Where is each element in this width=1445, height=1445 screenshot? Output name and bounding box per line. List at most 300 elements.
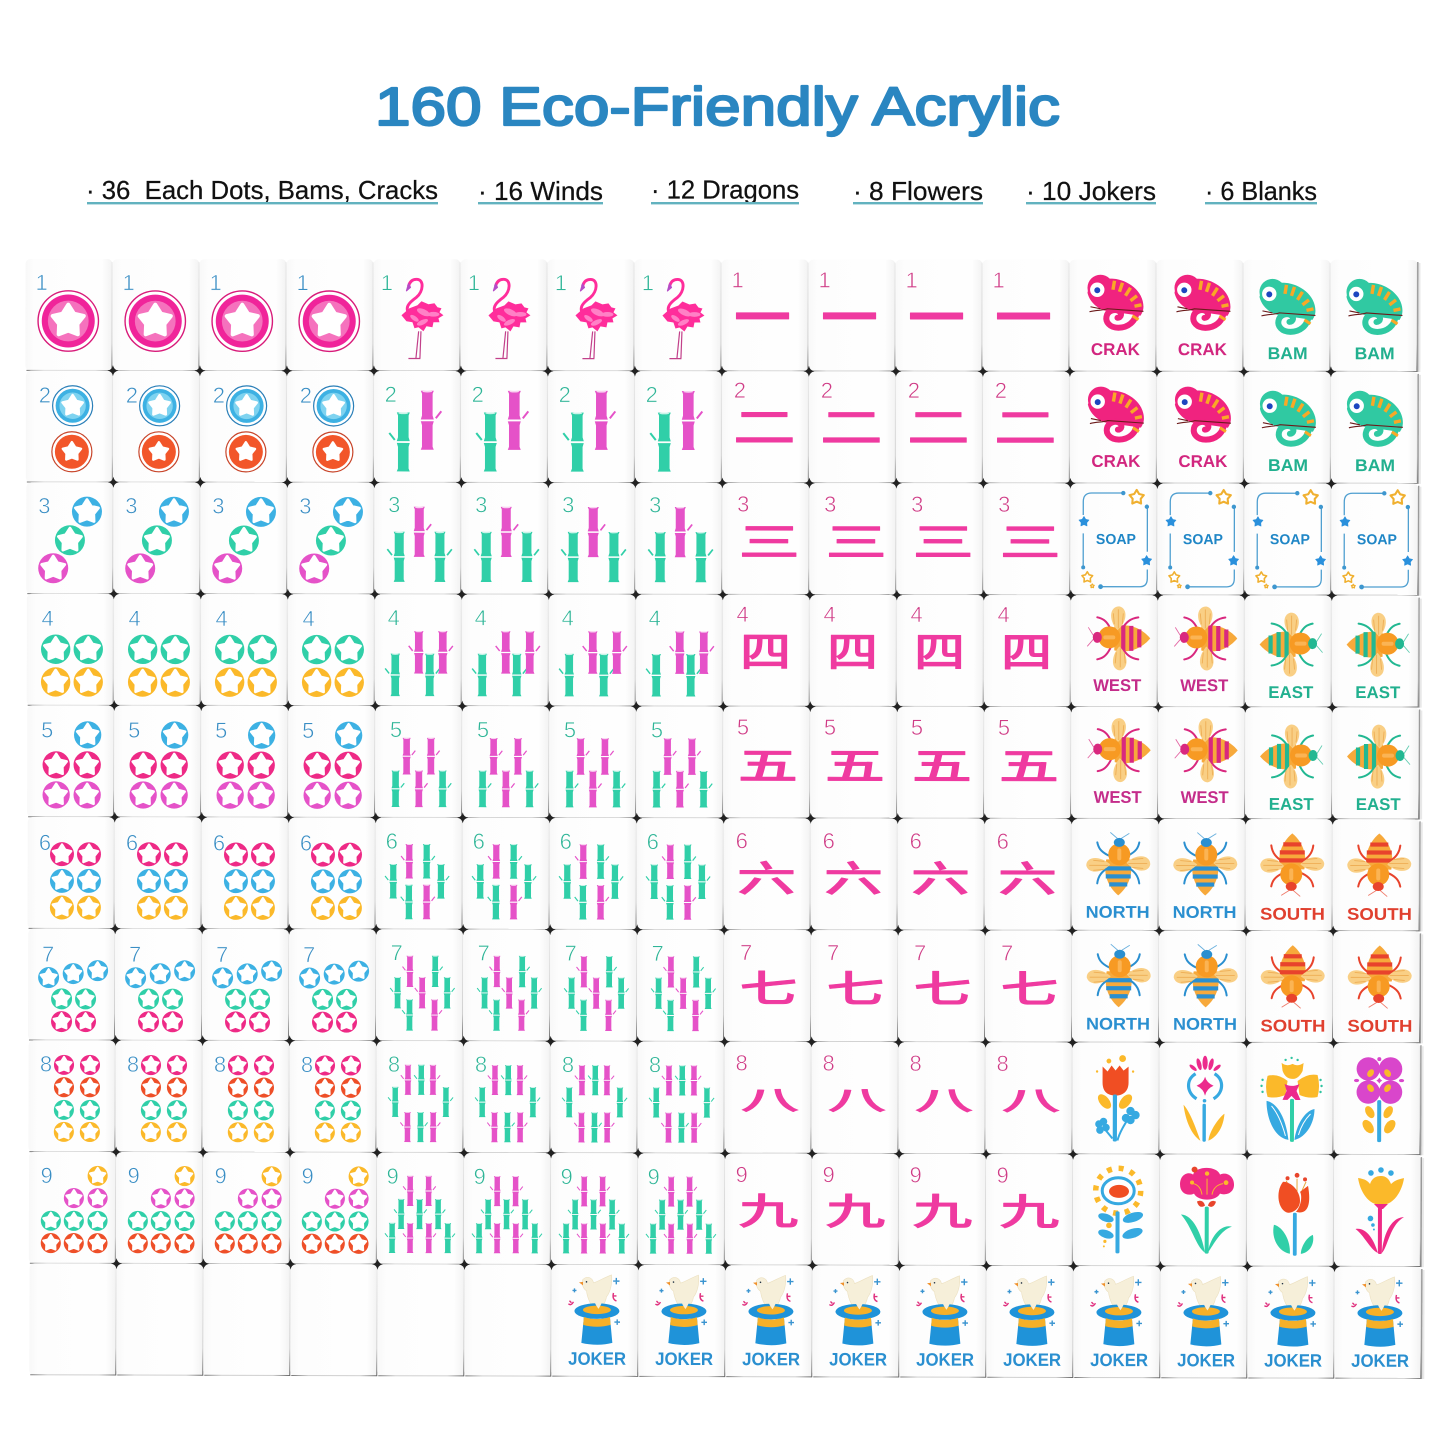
tile: dot 8: 8 (127, 1052, 139, 1077)
tile: bam 6 (631, 813, 724, 930)
tile: crack 9: 九 (999, 1192, 1059, 1233)
tile: crack 5: 五 (912, 745, 972, 788)
tile: crack 1: 一 (995, 287, 1052, 352)
tile: south wind: SOUTH (1260, 1017, 1325, 1036)
subheading: 10 jokers: · 10 Jokers (1026, 176, 1156, 206)
tile: bam 3 (630, 477, 722, 595)
tile: crack 2 (803, 366, 896, 483)
tile: dot 9 (110, 1146, 203, 1264)
tile: crack 6: 6 (997, 829, 1009, 854)
tile: bam 8: 8 (562, 1052, 574, 1077)
tile: dot 6: 6 (39, 830, 51, 855)
tile: crak dragon (1069, 260, 1156, 372)
tile: flower red tulip with stamens (1241, 1149, 1334, 1267)
tile: bam 5 (370, 700, 462, 818)
tile: bam 4 (630, 589, 723, 707)
tile: dot 9: 9 (214, 1163, 227, 1188)
tile: joker: JOKER (1003, 1350, 1061, 1370)
tile: dot 5 (196, 700, 288, 818)
tile: dot 8: 8 (40, 1051, 52, 1076)
tile: crack 5: 五 (825, 745, 885, 788)
tile: dot 4 (195, 589, 288, 706)
tile row 1 (25, 259, 1420, 372)
tile: dot 7 (28, 929, 115, 1041)
tile row 3 (26, 477, 1421, 596)
tile: joker: JOKER (1351, 1351, 1409, 1371)
tile: crak dragon (1064, 366, 1157, 484)
tile: crack 4: 四 (914, 629, 965, 676)
tile: bam 6 (370, 812, 463, 930)
tile: dot 7 (196, 923, 289, 1041)
tile: dot 3 (282, 477, 374, 594)
tile: bam 4: 4 (649, 606, 661, 631)
tile: dot 9: 9 (40, 1163, 53, 1188)
tile: dot 3 (195, 477, 287, 594)
tile: bam 6: 6 (647, 829, 659, 854)
tile: soap: SOAP (1270, 532, 1310, 548)
tile: joker: JOKER (916, 1350, 974, 1370)
tile: flamingo bam 1: 1 (381, 270, 393, 295)
tile: bam 8 (458, 1036, 551, 1153)
tile: crack 7: 7 (914, 940, 926, 965)
tile: bam 4 (369, 589, 462, 706)
tile: dot 2 (281, 365, 374, 483)
tile: dot 7 (109, 923, 202, 1041)
tile: south wind: SOUTH (1260, 905, 1325, 924)
tile: east wind: EAST (1269, 795, 1314, 814)
tile: dot 1: 1 (36, 270, 48, 295)
tile: bam 5: 5 (477, 717, 489, 742)
tile: bam 4: 4 (562, 606, 574, 631)
tile: west wind: WEST (1093, 676, 1142, 695)
tile: dot 1 (286, 259, 373, 371)
tile: dot 6: 6 (126, 830, 138, 855)
tile: crack 8: 8 (909, 1051, 922, 1076)
tile: crack 3 (717, 477, 809, 595)
tile: bam 8 (545, 1036, 638, 1153)
tile: dot 6 (196, 812, 289, 929)
tile: crack 9 (806, 1148, 899, 1266)
tile: crack 5: 5 (998, 715, 1010, 740)
tile: crack 3: 3 (911, 492, 923, 517)
tile: dot 4 (108, 588, 201, 706)
tile: crak dragon: CRAK (1178, 452, 1228, 471)
tile: crack 5 (718, 701, 810, 819)
tile: crack 1 (808, 260, 895, 372)
tile: crack 9: 九 (738, 1191, 798, 1233)
tile: bam 9 (458, 1147, 551, 1265)
tile row 4 (27, 588, 1422, 708)
tile: dot 9 (29, 1152, 116, 1264)
tile: crack 7 (979, 925, 1072, 1043)
tile: crack 4 (717, 589, 810, 707)
tile: bam dragon: BAM (1355, 456, 1395, 475)
tile: dot 7: 7 (42, 942, 54, 967)
tile: crack 8: 8 (735, 1050, 748, 1075)
tile: bam dragon (1325, 366, 1421, 484)
tile: crack 6: 6 (736, 828, 748, 853)
tile: crack 8: 八 (740, 1085, 800, 1116)
tile: dot 8: 8 (301, 1052, 313, 1077)
tile: crack 8 (806, 1036, 899, 1154)
tile: bam 9 (545, 1148, 638, 1265)
tile: crack 5: 五 (738, 745, 798, 788)
tile row 8 (28, 1035, 1424, 1155)
tile: joker (720, 1260, 813, 1377)
tile: joker: JOKER (1264, 1350, 1322, 1371)
tile: crack 5: 5 (824, 715, 836, 740)
tile: soap: SOAP (1183, 532, 1223, 548)
tile: crack 2: 二 (820, 404, 883, 452)
tile: crack 2: 二 (994, 404, 1057, 452)
tile: bam 8: 8 (649, 1052, 661, 1077)
tile: dot 3 (26, 482, 113, 594)
tile: north wind (1066, 813, 1159, 931)
tile: bam 3: 3 (388, 492, 400, 517)
tile: bam 7 (370, 924, 463, 1041)
tile: dot 1 (112, 259, 199, 371)
title: 160 Eco-Friendly Acrylic (375, 77, 1060, 137)
tile: crack 2: 二 (907, 404, 970, 452)
tile: dot 2 (26, 371, 113, 483)
tile: north wind (1066, 925, 1159, 1043)
tile: crack 2: 2 (821, 378, 833, 403)
tile: dot 1 (25, 259, 112, 371)
tile: bam 3: 3 (649, 492, 661, 517)
tile: bam 6 (457, 812, 550, 930)
tile: south wind (1240, 925, 1333, 1043)
tile: dot 2 (194, 365, 287, 483)
tile: bam dragon: BAM (1268, 456, 1308, 475)
tile: bam 2: 2 (559, 382, 571, 407)
tile: dot 4: 4 (215, 606, 228, 631)
tile: crack 9: 9 (735, 1162, 748, 1187)
tile: crack 1: 1 (732, 267, 744, 293)
tile: crack 4: 4 (823, 602, 836, 627)
tile: crack 8 (893, 1037, 986, 1154)
tile: dot 9 (284, 1147, 377, 1265)
tile: joker (1329, 1261, 1425, 1379)
tile: flamingo bam 1 (373, 259, 460, 371)
tile row 10 (29, 1258, 1425, 1379)
tile: crack 6: 六 (911, 859, 970, 900)
tile: dot 1: 1 (297, 270, 309, 295)
tile: dot 6 (283, 812, 376, 930)
tile: joker (1068, 1261, 1161, 1378)
tile: crack 1 (982, 260, 1069, 372)
tile: crack 8: 八 (827, 1085, 887, 1116)
tile: bam 5 (457, 701, 549, 818)
tile: dot 6: 6 (300, 830, 312, 855)
tile: dot 4 (282, 589, 375, 706)
tile: flamingo bam 1 (547, 259, 634, 371)
tile: bam 7 (544, 924, 637, 1042)
tile: crack 9: 九 (825, 1191, 885, 1233)
tile: crack 6: 六 (824, 859, 883, 900)
tile: west wind: WEST (1094, 788, 1142, 807)
tile: south wind (1327, 814, 1423, 931)
tile: crack 3: 3 (824, 492, 836, 517)
tile: crak dragon: CRAK (1091, 452, 1141, 471)
tile: bam 3: 3 (475, 492, 487, 517)
tile: flower pink bloom (1154, 1149, 1247, 1267)
tile: joker: JOKER (1177, 1350, 1235, 1370)
tile: south wind: SOUTH (1347, 1017, 1412, 1036)
tile: crack 6: 6 (910, 829, 922, 854)
tile: bam 5: 5 (390, 717, 402, 742)
tile row 5 (27, 700, 1422, 820)
tile: west wind (1153, 702, 1245, 819)
tile: crack 4: 四 (740, 629, 791, 676)
tile: bam 2: 2 (646, 382, 658, 407)
tile: dot 1: 1 (210, 270, 222, 295)
tile: dot 1: 1 (123, 270, 135, 295)
tile: west wind: WEST (1180, 676, 1229, 695)
tile: crak dragon (1156, 260, 1243, 372)
tile: flower red tulip (1067, 1037, 1160, 1155)
tile: crack 8: 八 (1001, 1086, 1061, 1116)
tile: joker (1242, 1261, 1335, 1379)
tile: east wind: EAST (1268, 683, 1314, 702)
tile: bam 5 (631, 701, 723, 818)
tile: crack 2: 2 (908, 378, 920, 403)
tile: bam 2 (542, 366, 635, 483)
tile: dot 3: 3 (299, 494, 312, 519)
tile: crack 1: 1 (819, 268, 831, 293)
tile: dot 8 (110, 1035, 203, 1152)
tile: flower pink diamond (1154, 1037, 1247, 1155)
tile: crack 2 (890, 366, 983, 483)
tile: joker (1155, 1261, 1248, 1378)
tile: crack 9: 九 (912, 1191, 972, 1233)
subheading: 12 dragons: · 12 Dragons (651, 174, 799, 204)
tile: blank (198, 1258, 291, 1376)
tile: crack 9: 9 (822, 1162, 835, 1187)
tile: east wind (1239, 590, 1332, 707)
tile: crack 7: 7 (827, 940, 839, 965)
tile: bam 6: 6 (473, 829, 485, 854)
tile: flamingo bam 1: 1 (555, 270, 567, 295)
tile: joker: JOKER (1090, 1350, 1148, 1370)
tile: dot 7 (283, 924, 376, 1041)
tile: crack 4 (978, 590, 1071, 707)
tile: dot 4: 4 (41, 606, 54, 631)
tile: bam 3: 3 (562, 492, 574, 517)
tile: crack 2: 2 (995, 378, 1007, 403)
tile: crack 5: 5 (911, 715, 923, 740)
tile: dot 5: 5 (41, 717, 53, 742)
tile: bam dragon (1243, 260, 1330, 372)
tile row 9 (29, 1146, 1424, 1267)
tile: crack 3 (978, 478, 1070, 595)
tile: north wind: NORTH (1086, 1015, 1150, 1034)
tile: crack 2 (716, 366, 809, 483)
tile: joker (981, 1260, 1074, 1378)
tile: bam 9: 9 (473, 1164, 486, 1189)
tile: crack 7 (718, 924, 811, 1042)
subheading: 8 flowers: · 8 Flowers (853, 176, 983, 206)
tile: crack 8 (980, 1037, 1073, 1154)
subheading: 36 each dots bams cracks: · 36 Each Dots, Bams, Cracks (86, 175, 438, 205)
tile: dot 2: 2 (300, 383, 312, 408)
tile: crack 7: 七 (739, 969, 797, 1010)
tile: crack 6: 六 (737, 859, 796, 900)
tile: crack 1: 一 (734, 287, 791, 352)
tile: joker (633, 1259, 726, 1377)
tile: crack 2: 2 (734, 378, 746, 403)
tile: blank (111, 1258, 204, 1376)
tile: joker: JOKER (655, 1349, 713, 1369)
tile: dot 9: 9 (127, 1163, 140, 1188)
tile: crack 6 (892, 813, 985, 931)
tile: blank (285, 1259, 378, 1376)
tile: crack 4: 四 (1001, 629, 1052, 676)
tile: dot 8 (28, 1040, 116, 1152)
tile: crack 3 (804, 478, 896, 595)
tile: bam 5: 5 (651, 717, 663, 742)
tile: bam dragon: BAM (1268, 344, 1308, 363)
tile: bam 4 (543, 589, 636, 707)
tile: bam dragon: BAM (1355, 344, 1395, 363)
tile: joker: JOKER (742, 1349, 800, 1369)
tile: crack 9: 9 (909, 1162, 922, 1187)
tile: crack 9 (980, 1149, 1073, 1266)
tile: crack 5: 五 (999, 745, 1059, 788)
tile: joker (546, 1259, 639, 1377)
tile: bam 9: 9 (386, 1164, 399, 1189)
tile: crack 5 (892, 701, 984, 819)
tile: bam dragon (1330, 260, 1420, 372)
tile: crack 6 (979, 813, 1072, 931)
tile: east wind: EAST (1355, 683, 1401, 702)
tile: dot 7: 7 (303, 942, 315, 967)
tile: bam dragon (1238, 366, 1331, 484)
tile: bam 5 (544, 701, 636, 818)
tile: crak dragon (1151, 366, 1244, 484)
tile: bam 2 (629, 366, 722, 483)
tile: east wind: EAST (1356, 795, 1401, 814)
tile: dot 8 (284, 1035, 377, 1153)
tile: bam 7: 7 (478, 940, 490, 966)
tile: soap (1239, 478, 1331, 596)
tile: crack 1 (721, 259, 808, 371)
tile: joker (894, 1260, 987, 1378)
tile: crack 9: 9 (996, 1163, 1009, 1188)
tile: dot 6 (109, 812, 202, 929)
tile: south wind: SOUTH (1347, 905, 1412, 924)
tile: bam 6 (544, 812, 637, 930)
tile: soap (1326, 478, 1421, 596)
tile: crack 4 (804, 589, 897, 707)
tile: crack 3: 3 (737, 491, 749, 517)
tile: bam 4: 4 (388, 605, 400, 630)
tile: joker (807, 1260, 900, 1378)
tile: joker: JOKER (829, 1349, 887, 1370)
tile: soap (1065, 478, 1157, 595)
tile: crack 6: 六 (998, 859, 1057, 900)
tile: dot 8: 8 (214, 1052, 226, 1077)
tile: crack 4: 四 (827, 629, 878, 676)
tile: crack 8 (719, 1036, 812, 1154)
tile: bam 9: 9 (560, 1164, 573, 1189)
tile: crack 1: 一 (908, 287, 965, 352)
tile: north wind (1153, 813, 1246, 931)
tile: north wind: NORTH (1173, 1015, 1237, 1034)
tile: crack 4 (891, 589, 984, 707)
tile: crack 7 (805, 925, 898, 1042)
tile: crack 2: 二 (733, 404, 796, 452)
tile: crack 8: 八 (914, 1086, 974, 1116)
tile: bam 8: 8 (475, 1052, 487, 1077)
tile: flamingo bam 1 (460, 259, 547, 371)
tile: dot 4: 4 (128, 606, 141, 631)
tile: west wind: WEST (1181, 788, 1229, 807)
tile: bam 2 (455, 365, 548, 483)
tile: crack 1: 一 (821, 287, 878, 352)
tile: dot 3: 3 (125, 493, 138, 518)
tile: dot 8 (197, 1035, 290, 1153)
tile: crack 4: 4 (910, 602, 923, 627)
tile: bam 2: 2 (385, 382, 397, 407)
tile: bam 3 (369, 477, 461, 595)
tile row 7 (28, 923, 1423, 1043)
tile: dot 3 (108, 477, 200, 594)
tile: west wind (1066, 701, 1158, 819)
tile: north wind: NORTH (1086, 903, 1150, 922)
tile: soap: SOAP (1357, 532, 1397, 548)
tile: flamingo bam 1: 1 (468, 270, 480, 295)
tile: crack 5 (805, 701, 897, 819)
tile: south wind (1327, 926, 1423, 1043)
tile: flower yellow tulip (1328, 1149, 1424, 1267)
tile: bam 3 (543, 477, 635, 595)
tile: crack 3: 3 (998, 492, 1010, 517)
tile: joker: JOKER (568, 1349, 626, 1369)
tile: blank (29, 1263, 117, 1376)
tile: west wind (1065, 590, 1158, 707)
tile: bam 2 (368, 365, 461, 483)
tile: blank (459, 1259, 552, 1377)
tile: crack 1 (895, 260, 982, 372)
tile: crack 4: 4 (736, 602, 749, 627)
tile: crack 3: 三 (999, 520, 1061, 565)
tile: crack 3: 三 (738, 520, 800, 564)
tile: bam 2: 2 (472, 382, 484, 407)
tile: crack 8: 8 (822, 1051, 835, 1076)
tile: bam 4: 4 (475, 605, 487, 630)
tile: dot 3: 3 (38, 493, 51, 518)
tile: crack 5 (979, 701, 1071, 819)
tile: dot 2 (107, 365, 200, 483)
tile: bam 7: 7 (565, 941, 577, 966)
tile: dot 2: 2 (39, 383, 51, 408)
tile: crack 3: 三 (912, 520, 974, 565)
tile: crack 3: 三 (825, 520, 887, 564)
tile: east wind (1327, 702, 1422, 820)
tile: bam 6: 6 (386, 829, 398, 854)
tile: north wind: NORTH (1173, 903, 1237, 922)
tile: bam 8 (371, 1035, 464, 1153)
tile: crack 7 (892, 925, 985, 1042)
tile: dot 5: 5 (128, 718, 140, 743)
tile: dot 4: 4 (302, 606, 315, 631)
tile: bam 4 (456, 589, 549, 706)
tile: crack 5: 5 (737, 714, 749, 740)
tile: crack 7: 7 (740, 940, 752, 965)
tile: crak dragon: CRAK (1091, 340, 1141, 359)
tile: crack 1: 1 (993, 268, 1005, 293)
tile: crack 7: 7 (1001, 941, 1013, 966)
